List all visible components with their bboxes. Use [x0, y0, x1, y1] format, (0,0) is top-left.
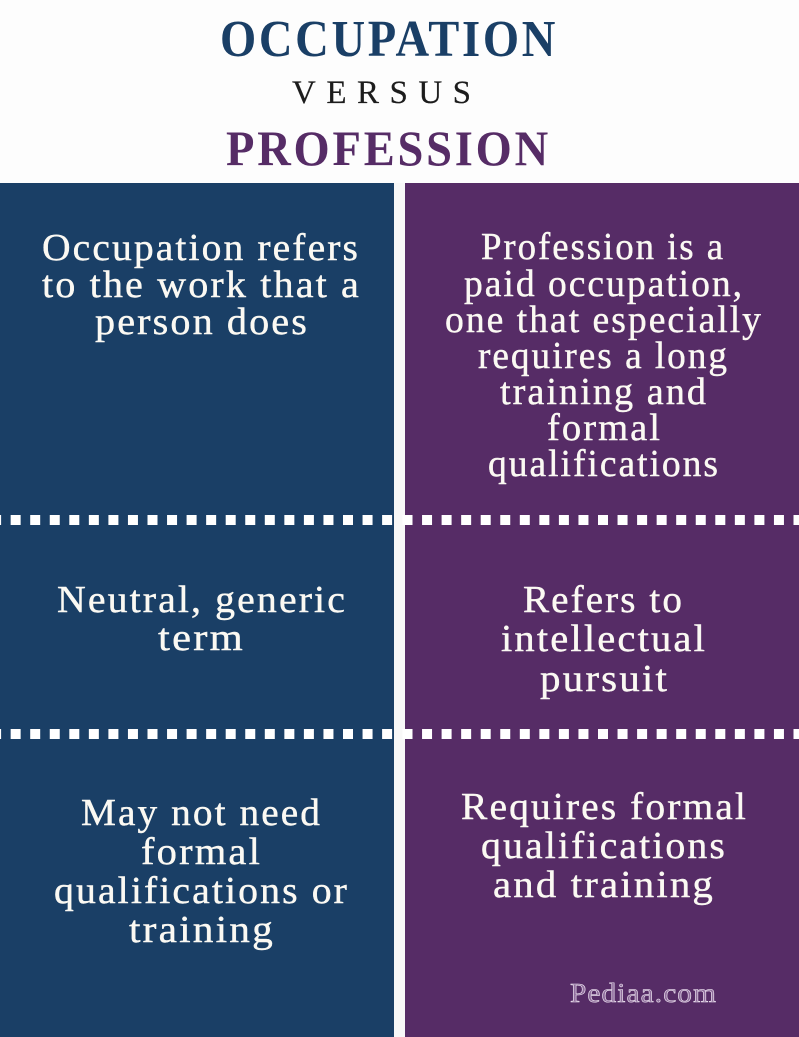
- text: profession qualifications: Requires formal: [461, 786, 748, 828]
- divider: second dotted row: [0, 729, 799, 739]
- text: occupation term type: [57, 579, 347, 659]
- text: profession definition: formal: [547, 407, 662, 449]
- panel: occupation column: [0, 183, 394, 1037]
- text: occupation term type: term: [158, 617, 245, 659]
- text: occupation qualifications: training: [129, 909, 275, 951]
- text: profession definition: requires a long: [478, 335, 729, 377]
- text: profession term type: [501, 579, 707, 700]
- text: occupation definition: [42, 227, 361, 343]
- heading: occupation: OCCUPATION: [220, 11, 558, 68]
- text: occupation definition: to the work that a: [42, 264, 361, 306]
- text: occupation definition: person does: [95, 301, 309, 343]
- text: profession definition: one that especially: [445, 299, 763, 341]
- credit: Pediaa.com: Pediaa.com: [570, 978, 717, 1008]
- text: profession qualifications: [461, 786, 748, 906]
- heading: versus: VERSUS: [292, 75, 471, 111]
- text: occupation qualifications: May not need: [81, 792, 322, 834]
- panel: profession column: [405, 183, 799, 1037]
- text: profession term type: Refers to: [523, 579, 684, 621]
- divider: first dotted row: [0, 515, 799, 525]
- text: profession term type: intellectual: [501, 618, 707, 660]
- text: occupation term type: Neutral, generic: [57, 579, 347, 621]
- text: occupation qualifications: [54, 792, 349, 951]
- text: occupation qualifications: qualifications or: [54, 870, 349, 912]
- text: profession definition: training and: [500, 371, 708, 413]
- heading: profession: PROFESSION: [226, 120, 551, 176]
- text: occupation qualifications: formal: [141, 831, 262, 873]
- text: occupation definition: Occupation refers: [42, 227, 360, 269]
- text: profession qualifications: qualifications: [481, 825, 727, 867]
- text: profession term type: pursuit: [540, 658, 669, 700]
- text: profession definition: qualifications: [488, 443, 720, 485]
- text: profession qualifications: and training: [493, 864, 715, 906]
- title header: [0, 0, 799, 183]
- text: profession definition: paid occupation,: [464, 263, 744, 305]
- text: profession definition: [445, 226, 763, 485]
- text: profession definition: Profession is a: [481, 226, 725, 268]
